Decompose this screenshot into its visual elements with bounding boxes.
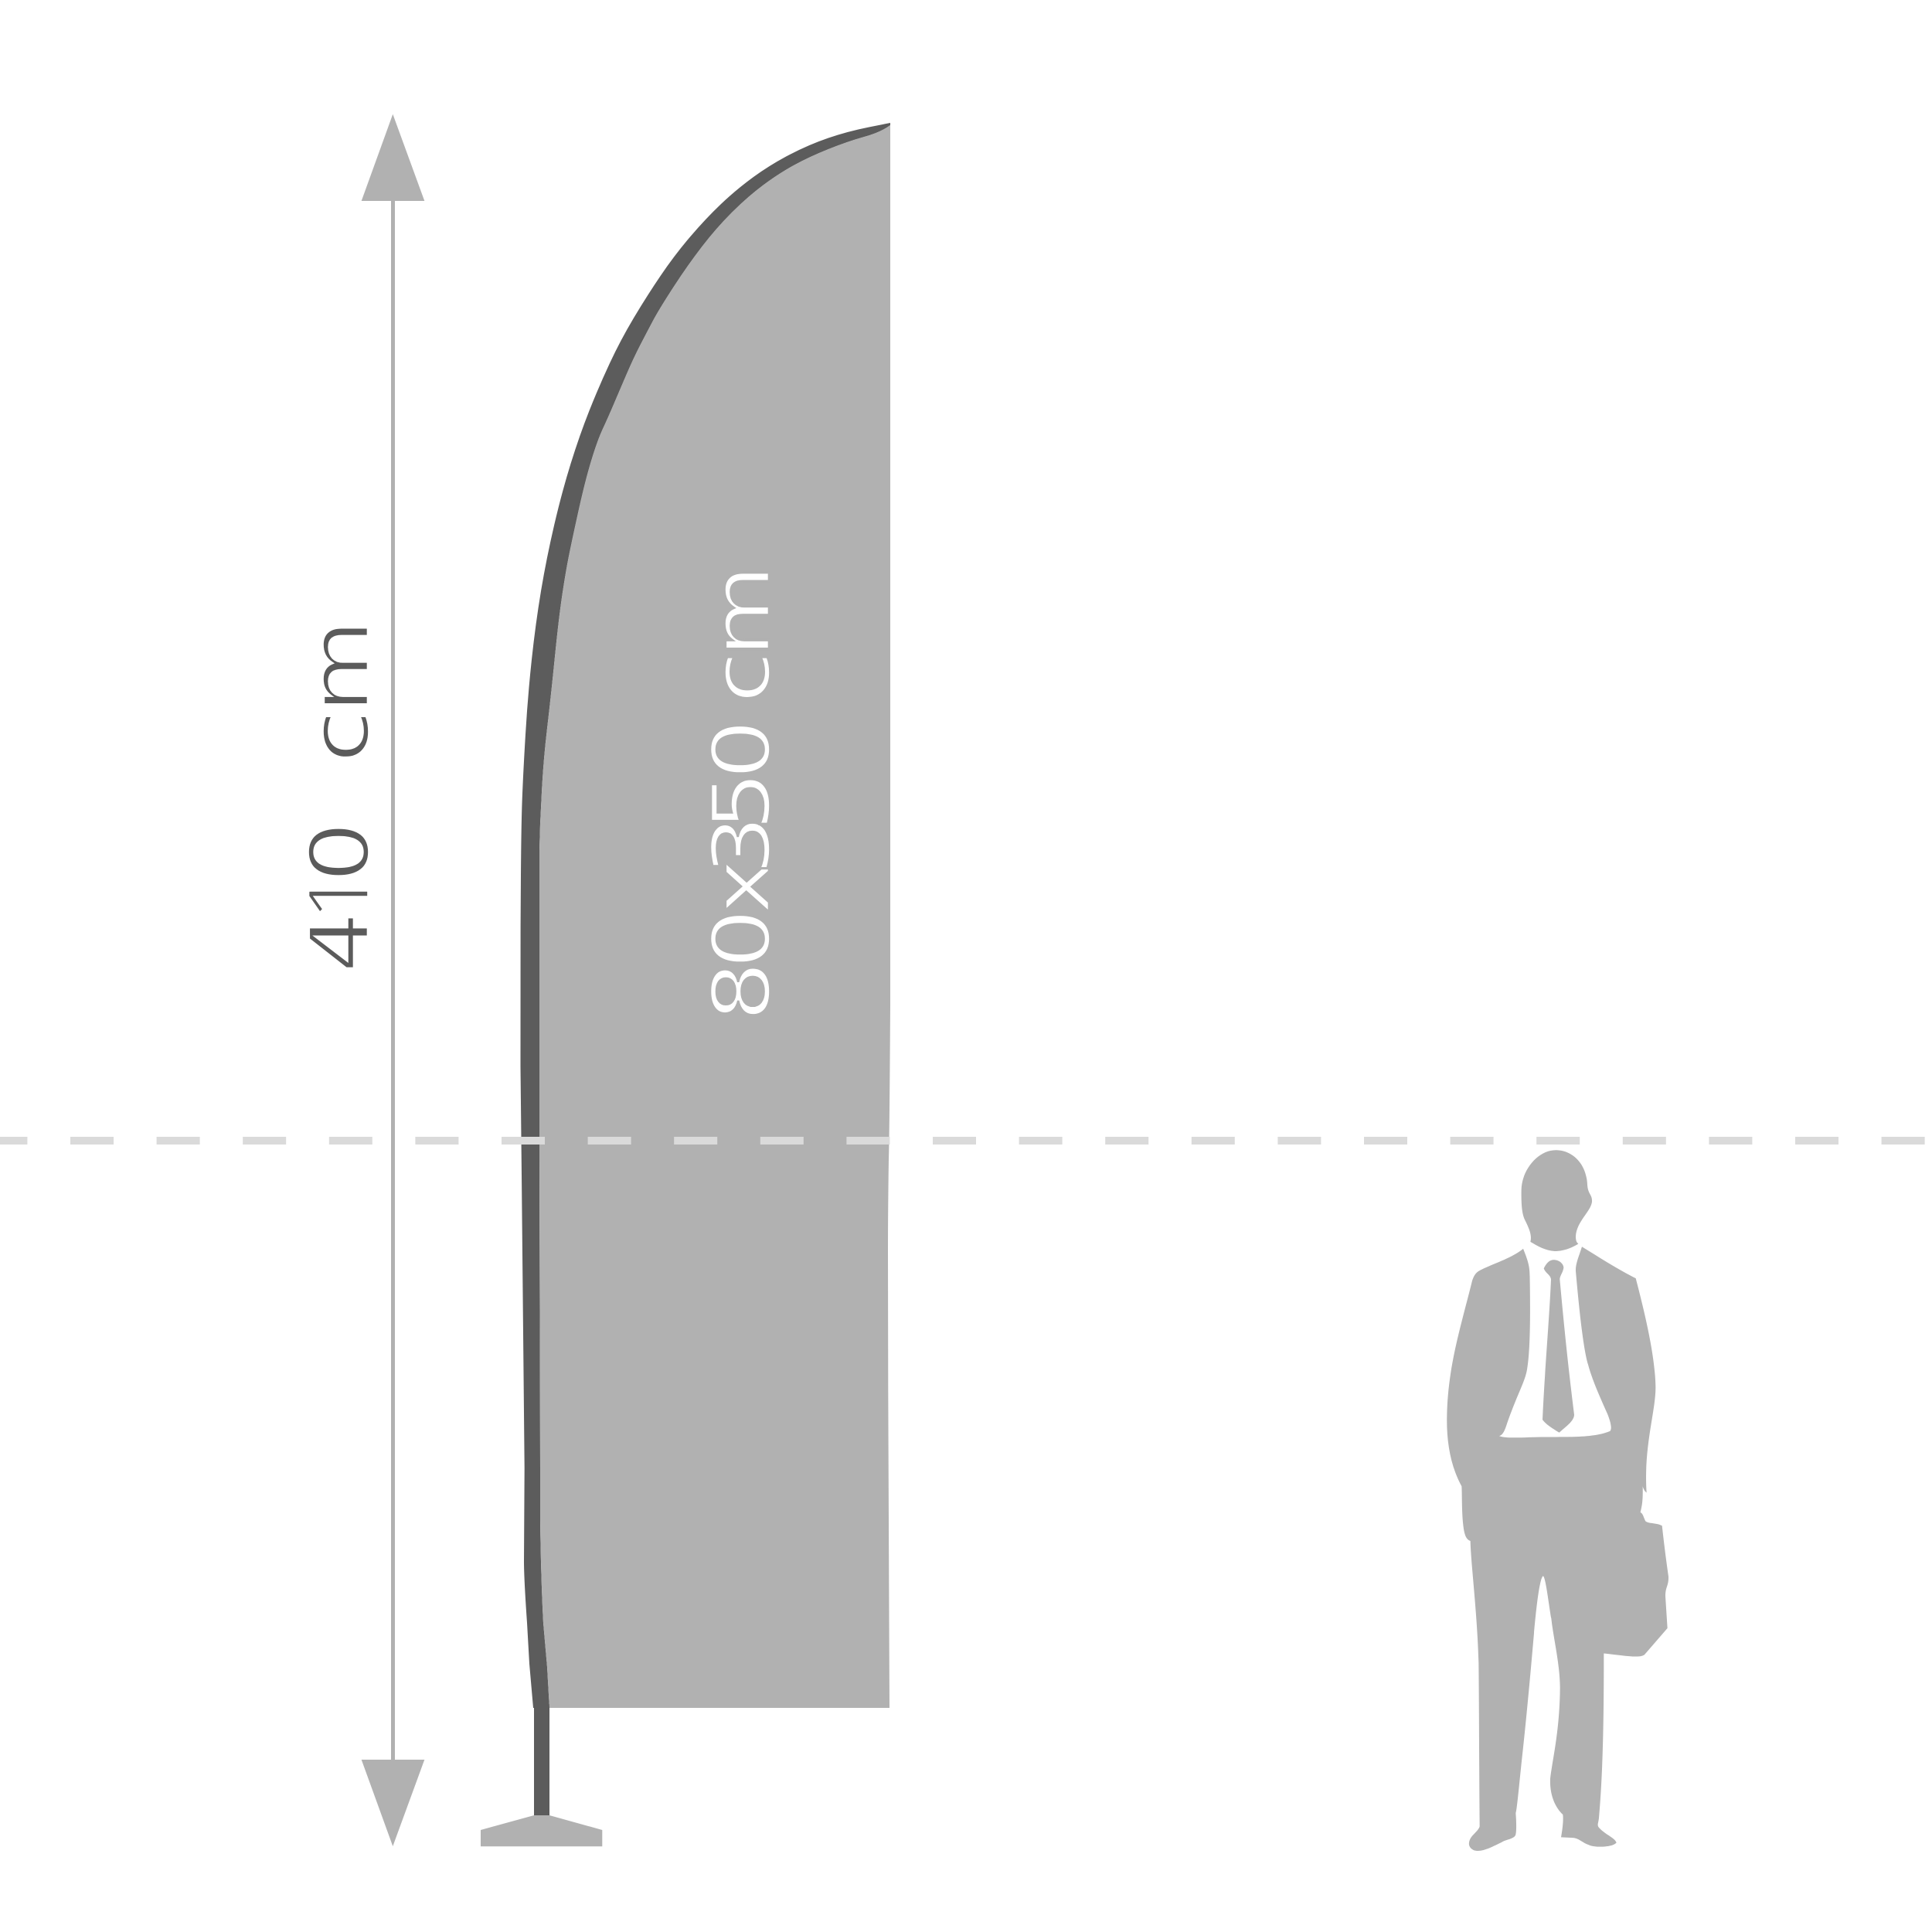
dashed person-height reference line <box>0 1137 1932 1145</box>
height label: 410 cm: 0 cm <box>294 619 387 883</box>
feather flag <box>521 123 890 1708</box>
height dimension arrow <box>362 114 424 1846</box>
flag size label: 80x350 cm: 80x350 cm <box>695 564 787 1022</box>
flag pole curved sleeve <box>521 123 890 1708</box>
head <box>1522 1150 1592 1251</box>
height label: 410 cm: 1 <box>299 868 379 926</box>
flag fabric <box>539 123 890 1708</box>
height label: 410 cm: 4 <box>294 912 387 973</box>
flag pole stand <box>481 1704 602 1846</box>
body and briefcase <box>1447 1247 1668 1851</box>
icon: businessman silhouette with briefcase <box>1447 1150 1668 1851</box>
necktie <box>1543 1260 1574 1433</box>
